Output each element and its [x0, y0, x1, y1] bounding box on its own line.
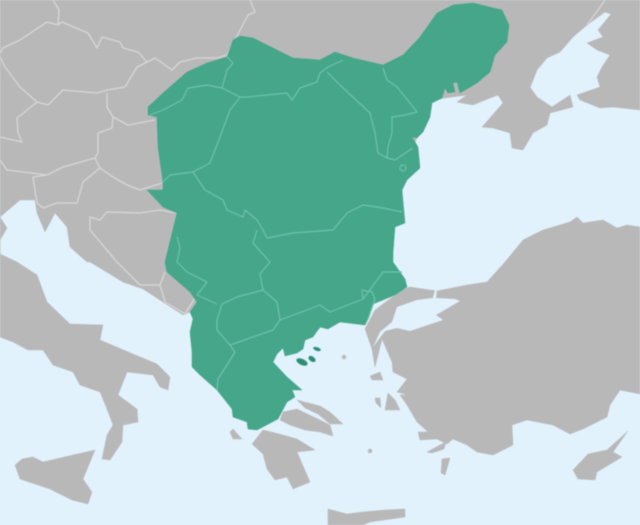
country borders on grey land [0, 0, 605, 314]
land: central Greece [280, 409, 333, 436]
land: Peloponnese [252, 430, 315, 489]
country borders inside the region [150, 57, 417, 390]
land: Aegean islands [342, 355, 450, 475]
Sea of Marmara [373, 290, 460, 347]
land: Italy [0, 217, 170, 460]
land: Turkey [365, 217, 640, 455]
land: Kefalonia [230, 429, 242, 439]
green highlighted region [147, 3, 509, 430]
land: Crete [328, 509, 405, 525]
Chalkidiki and northern Aegean islands [295, 346, 321, 367]
land: Evia [297, 400, 343, 424]
land: central and eastern Europe [0, 0, 640, 340]
land: Sicily [15, 450, 95, 504]
land: Cyprus [573, 431, 628, 480]
region shape [147, 3, 509, 430]
